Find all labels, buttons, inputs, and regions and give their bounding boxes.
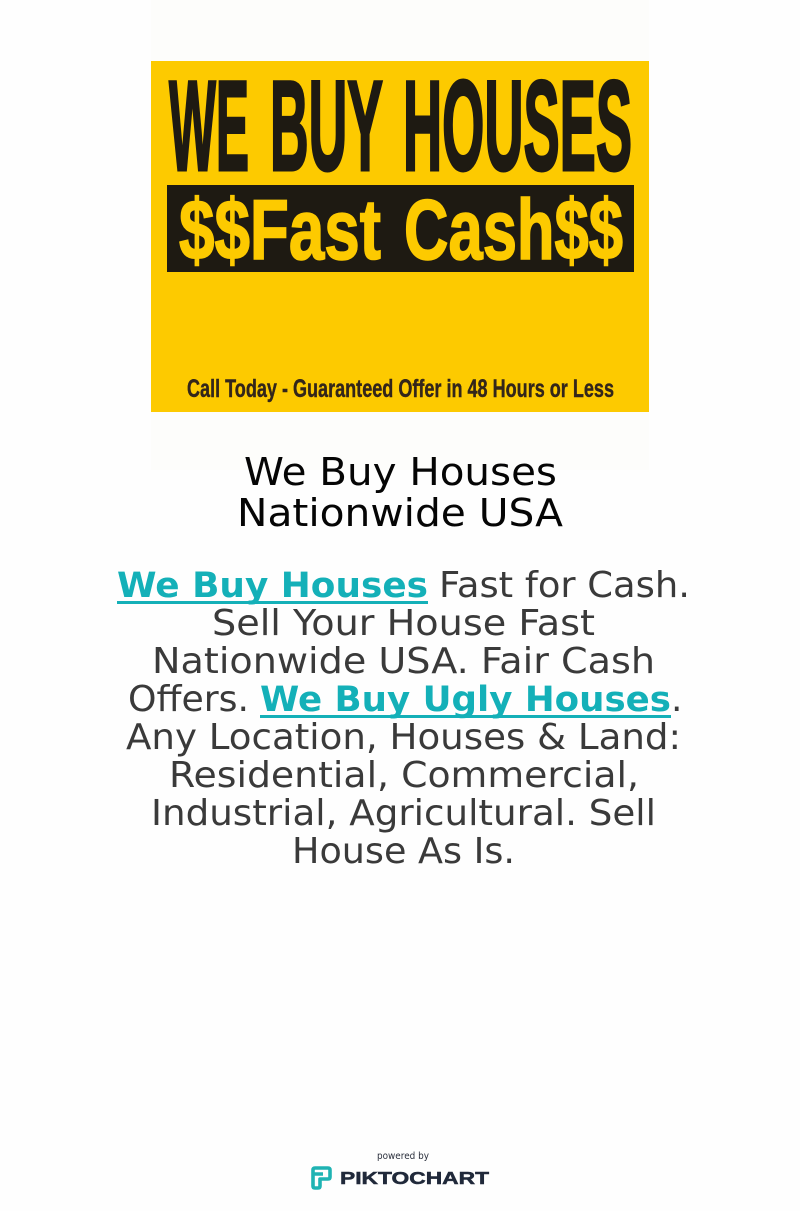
sign headline: BUY xyxy=(270,55,383,198)
body text: Sell Your House Fast xyxy=(212,603,595,644)
body text: House As Is. xyxy=(292,831,515,872)
body text: Any Location, Houses & Land: xyxy=(126,717,681,758)
body text: Nationwide USA. Fair Cash xyxy=(152,641,655,682)
sign banner xyxy=(167,185,634,272)
sign banner text: Cash$$ xyxy=(404,183,623,278)
icon: piktochart mark xyxy=(313,1168,330,1188)
title: Nationwide USA xyxy=(237,491,563,535)
sign call to action: Call Today - Guaranteed Offer in 48 Hours or Less xyxy=(187,375,614,403)
title: We Buy Houses xyxy=(244,450,557,494)
body text: Fast for Cash. xyxy=(439,565,690,606)
powered by label: powered by xyxy=(377,1151,429,1162)
sign headline: WE xyxy=(169,55,249,198)
body text xyxy=(117,565,690,872)
sign headline xyxy=(169,55,632,198)
footer: piktochart logo xyxy=(313,1151,489,1188)
body text: Offers. xyxy=(128,679,249,720)
body text: Residential, Commercial, xyxy=(169,755,639,796)
wordmark: PIKTOCHART xyxy=(340,1168,489,1188)
body text: . xyxy=(671,679,682,720)
sign banner text: $$Fast xyxy=(179,183,381,278)
body text: Industrial, Agricultural. Sell xyxy=(151,793,656,834)
title xyxy=(237,450,563,535)
sign banner text xyxy=(179,183,623,278)
body text: We Buy Houses xyxy=(117,566,428,606)
sign background xyxy=(151,61,649,412)
image: we buy houses sign xyxy=(151,0,649,470)
body text: We Buy Ugly Houses xyxy=(260,680,671,720)
